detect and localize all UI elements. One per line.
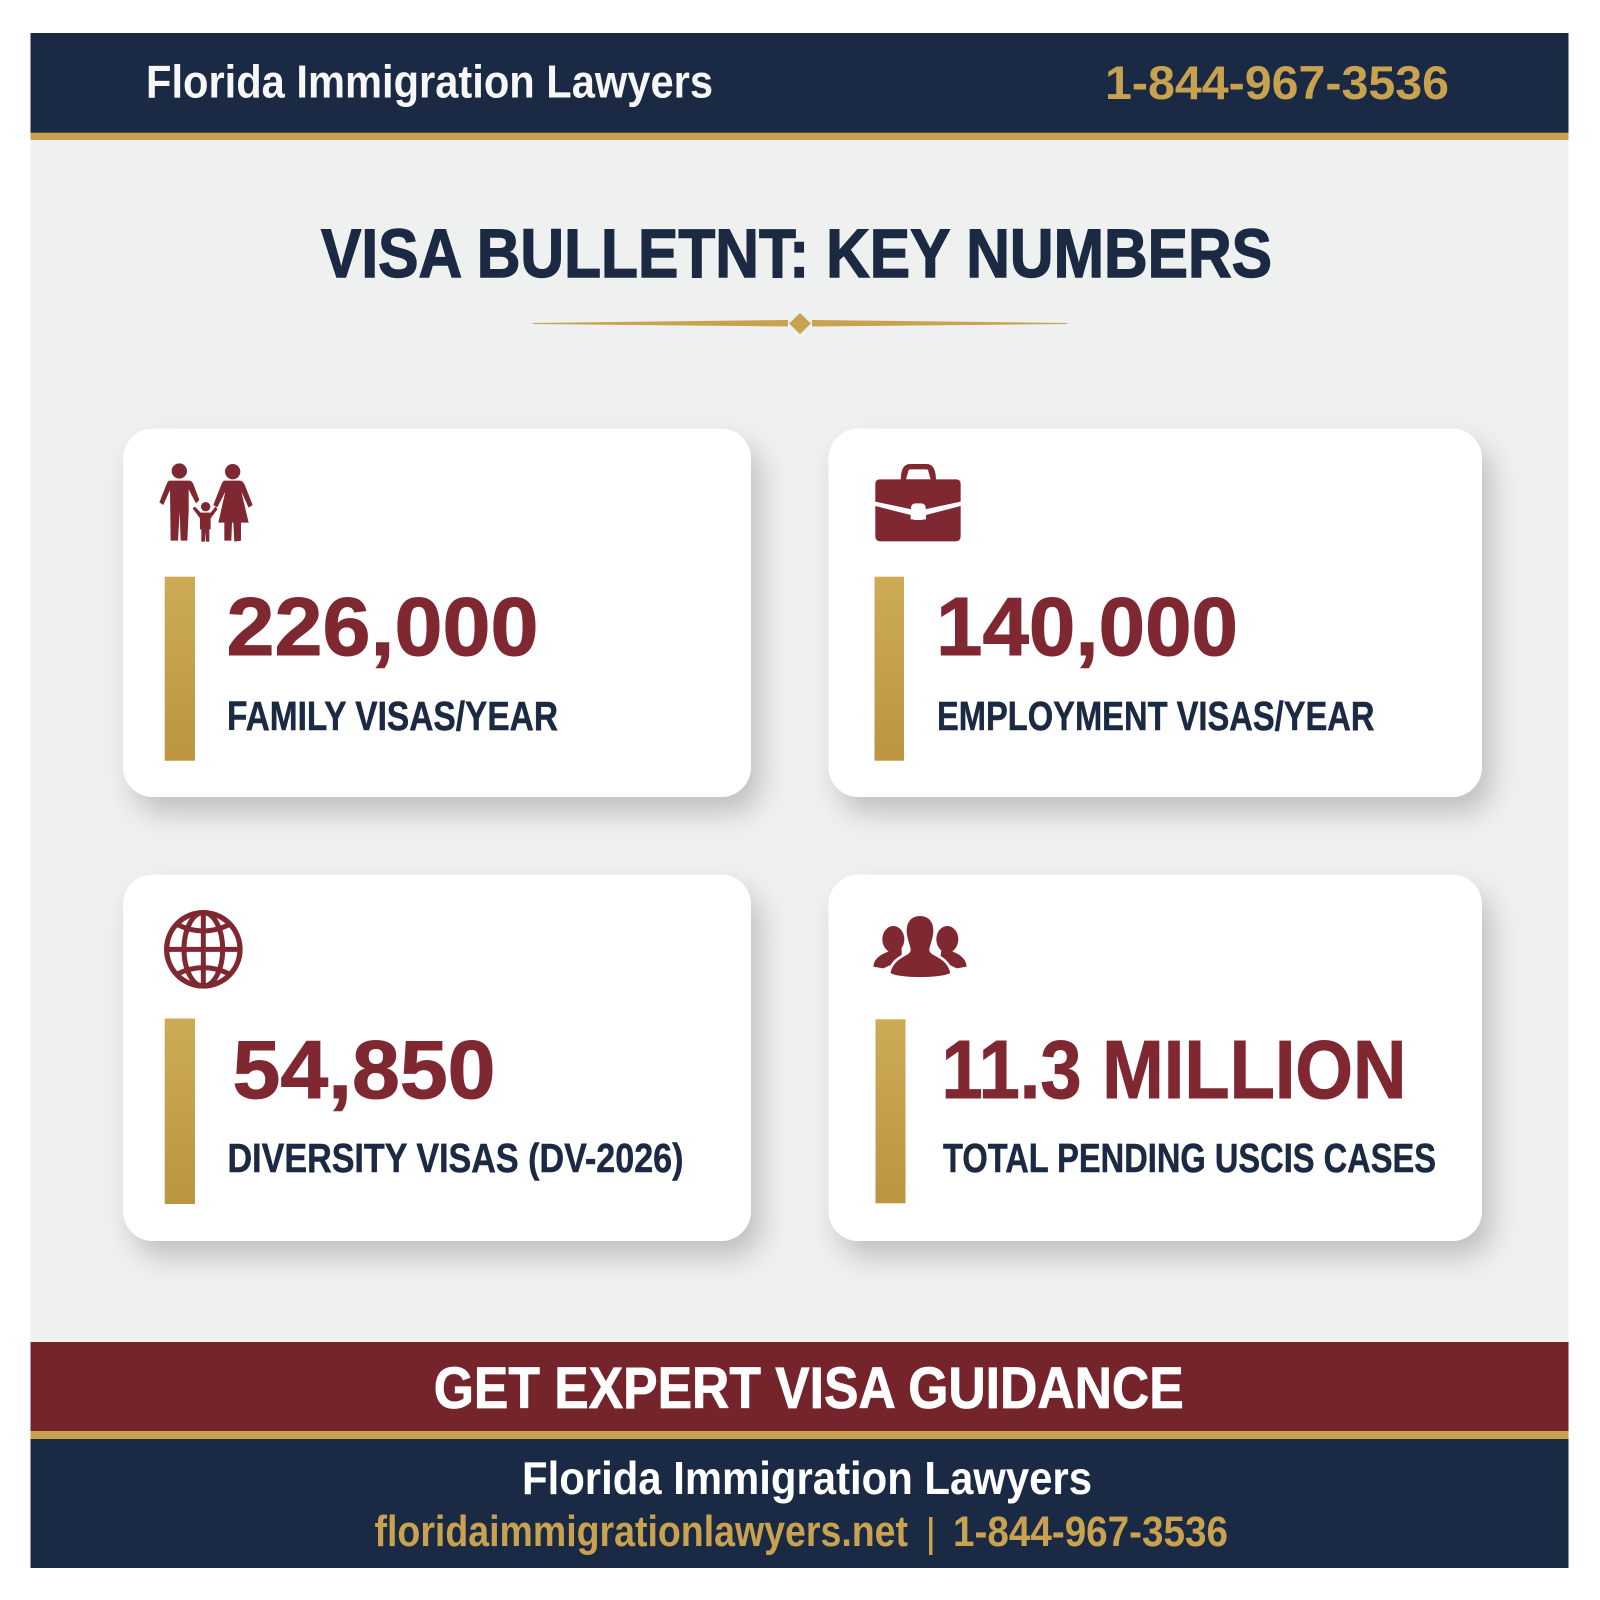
icon: group of people (873, 915, 967, 978)
gold accent bar (165, 577, 195, 761)
panel: family visas (123, 428, 751, 797)
title: VISA BULLETNT: KEY NUMBERS (321, 215, 1272, 292)
statistic: 226,000 (226, 580, 538, 673)
footer website: floridaimmigrationlawyers.net (374, 1507, 908, 1556)
footer separator (929, 1517, 932, 1555)
panel: diversity visas (123, 874, 751, 1241)
call-to-action text: GET EXPERT VISA GUIDANCE (434, 1356, 1184, 1421)
statistic label: DIVERSITY VISAS (DV-2026) (228, 1135, 684, 1181)
gold accent bar (874, 577, 904, 761)
call-to-action band (30, 1342, 1568, 1439)
statistic label: EMPLOYMENT VISAS/YEAR (937, 693, 1374, 739)
icon: globe (167, 913, 240, 986)
footer band (30, 1439, 1568, 1568)
statistic: 54,850 (232, 1023, 496, 1116)
statistic: 140,000 (936, 580, 1238, 673)
header band (30, 33, 1568, 140)
icon: briefcase (875, 464, 961, 541)
header phone number: 1-844-967-3536 (1105, 56, 1449, 109)
panel: employment visas (828, 428, 1482, 797)
gold accent bar (165, 1018, 195, 1204)
statistic label: FAMILY VISAS/YEAR (227, 693, 558, 739)
title divider with diamond (533, 313, 1067, 334)
footer firm name: Florida Immigration Lawyers (522, 1452, 1092, 1504)
footer phone number: 1-844-967-3536 (953, 1508, 1228, 1556)
gold accent bar (876, 1019, 906, 1203)
panel: pending cases (828, 874, 1482, 1241)
icon: family (159, 463, 253, 542)
statistic label: TOTAL PENDING USCIS CASES (943, 1135, 1436, 1181)
header firm name: Florida Immigration Lawyers (146, 56, 713, 108)
statistic: 11.3 MILLION (942, 1023, 1406, 1116)
